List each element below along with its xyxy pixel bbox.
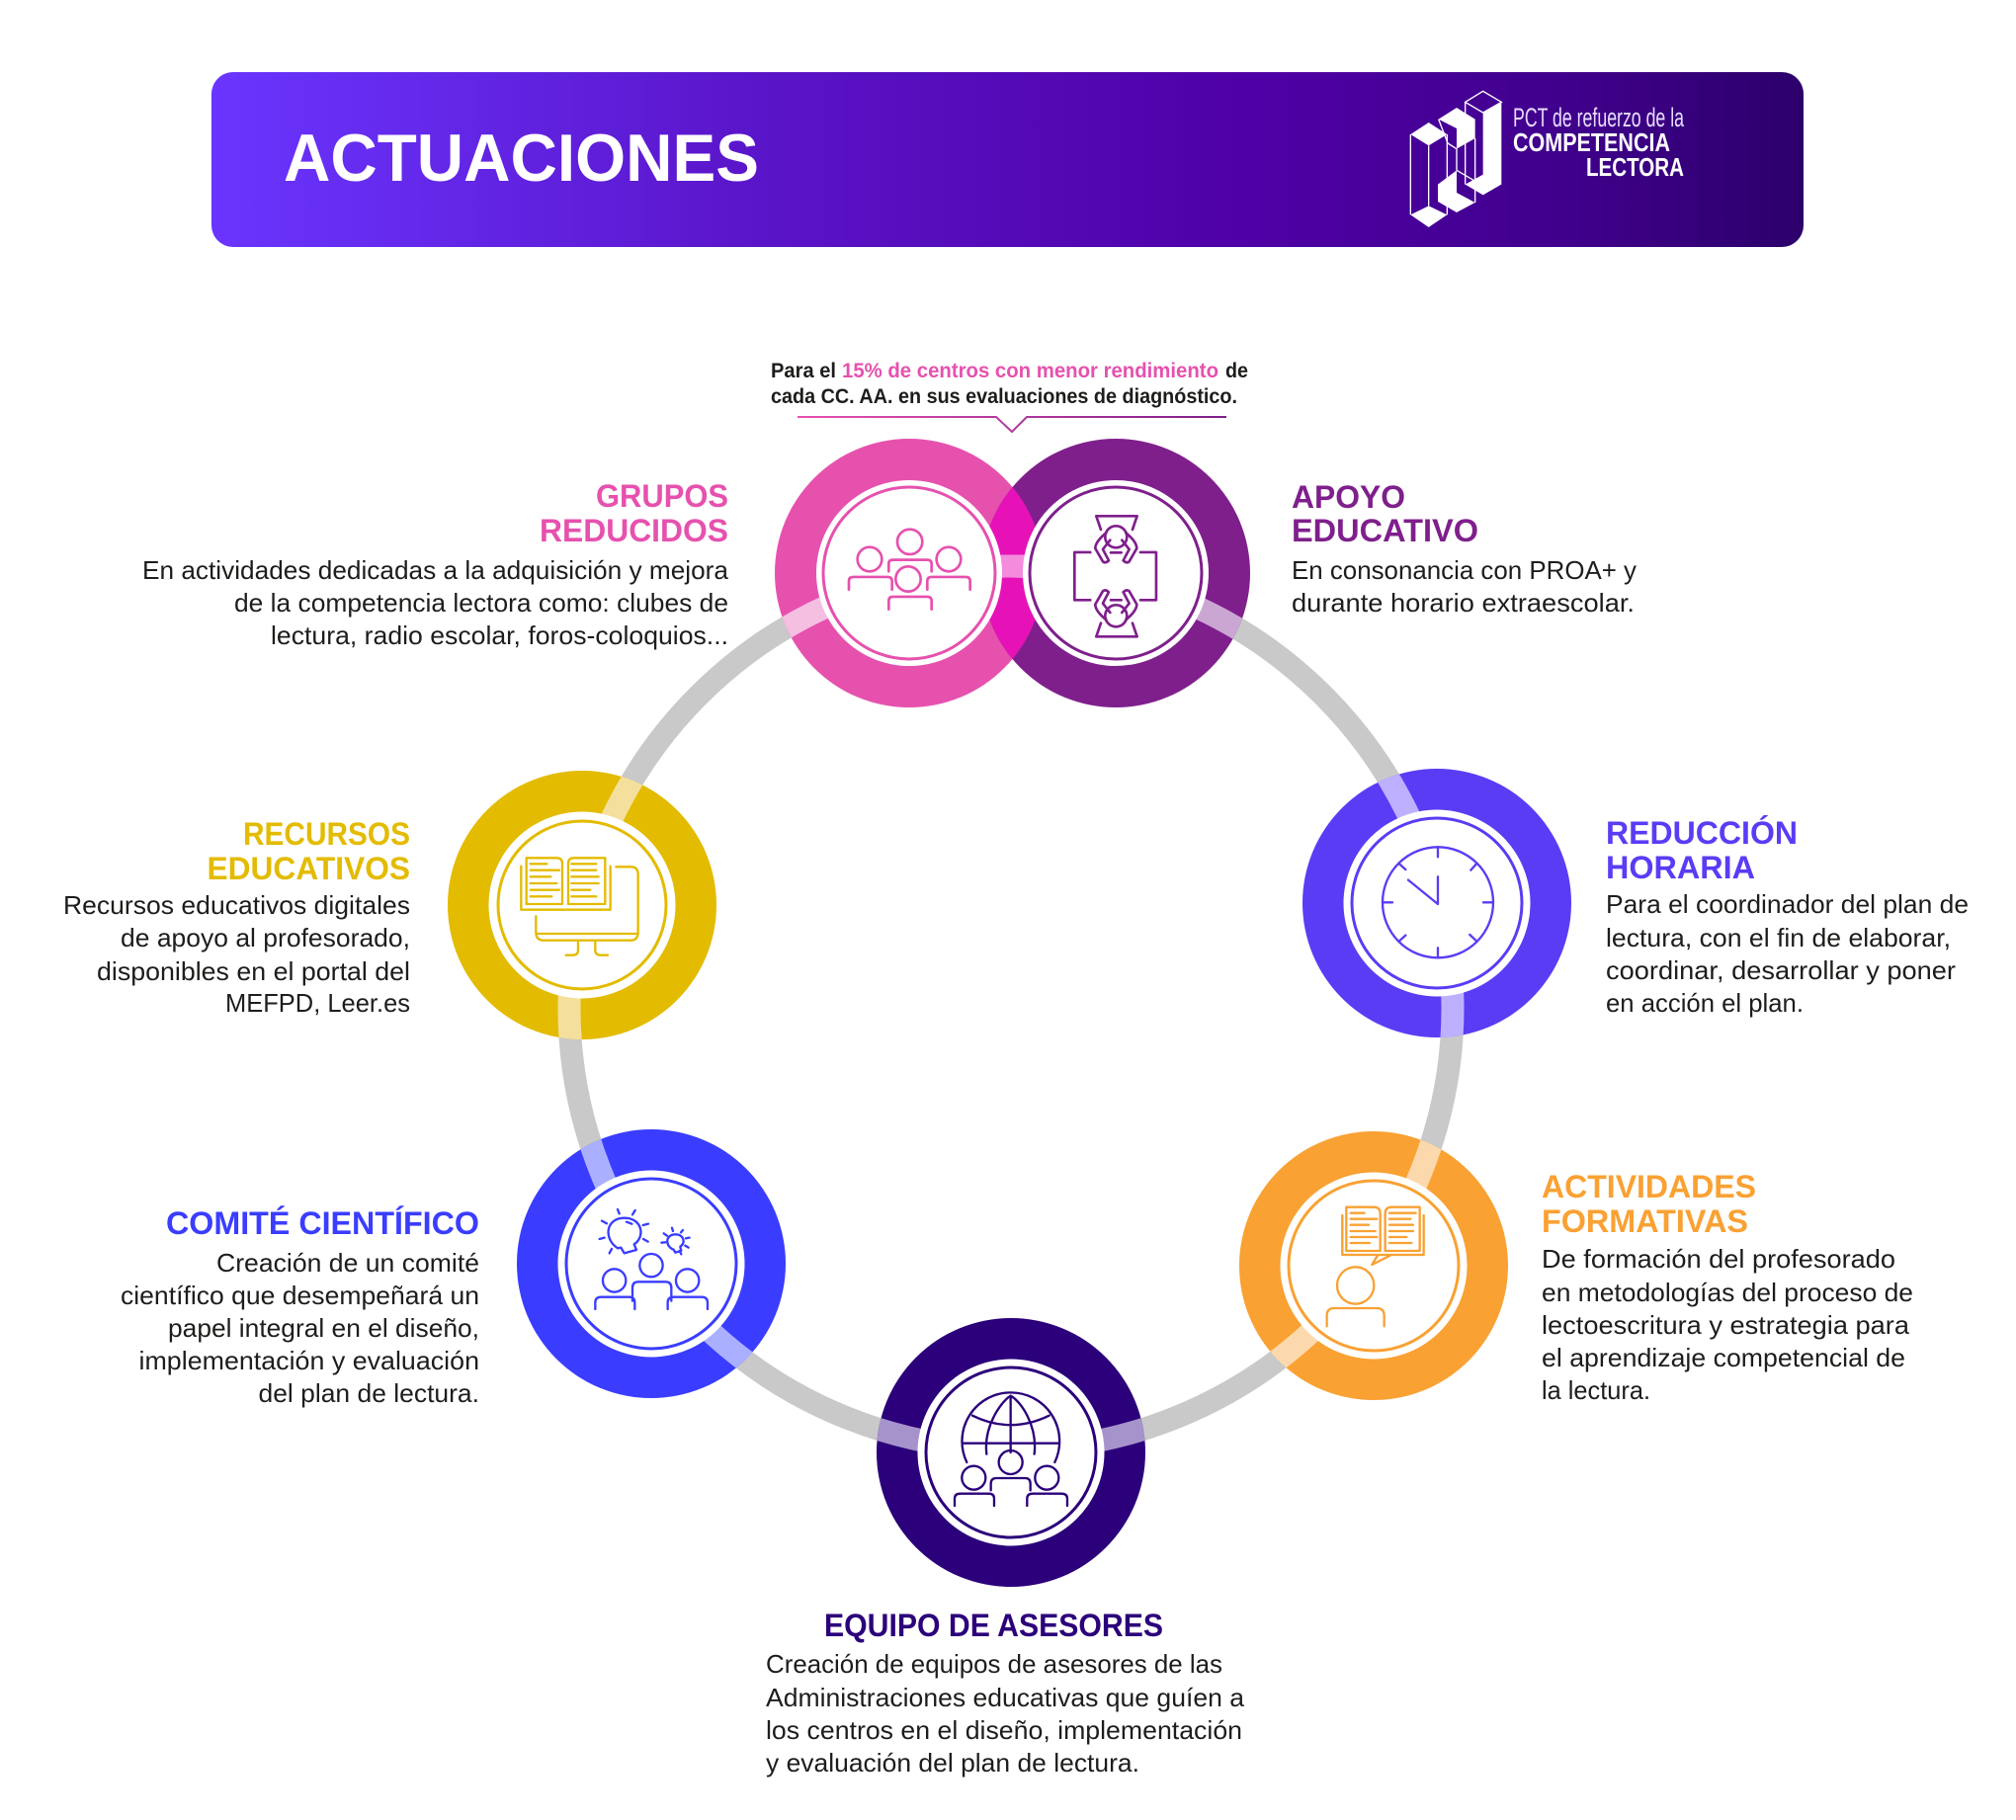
callout: target centres: de bbox=[1225, 360, 1248, 382]
node: comité científico circle bbox=[517, 1129, 786, 1398]
text: apoyo educativo: En consonancia con PROA+ y bbox=[1292, 555, 1637, 585]
text: actividades formativas: De formación del profesorado bbox=[1542, 1244, 1895, 1274]
text: grupos reducidos: lectura, radio escolar, foros-coloquios... bbox=[271, 620, 728, 650]
text: comité científico: Creación de un comité bbox=[216, 1248, 479, 1278]
text: actividades formativas: la lectura. bbox=[1542, 1375, 1650, 1405]
node: reducción horaria circle bbox=[1302, 769, 1571, 1037]
icon: person with book speech bubble bbox=[1327, 1207, 1424, 1326]
text: grupos reducidos: de la competencia lectora como: clubes de bbox=[234, 588, 728, 618]
text: comité científico: implementación y evaluación bbox=[138, 1346, 479, 1375]
text: actividades formativas bbox=[1542, 1169, 1913, 1405]
text: reducción horaria: Para el coordinador del plan de bbox=[1606, 889, 1969, 919]
text: equipo de asesores: Administraciones educativas que guíen a bbox=[766, 1683, 1245, 1712]
text: grupos reducidos: REDUCIDOS bbox=[540, 513, 728, 548]
text: recursos educativos: de apoyo al profesorado, bbox=[121, 923, 410, 952]
icon: group of people bbox=[849, 530, 970, 610]
logo text: LECTORA bbox=[1586, 152, 1684, 182]
icon: globe with people bbox=[955, 1392, 1067, 1506]
text: reducción horaria: REDUCCIÓN bbox=[1606, 815, 1798, 851]
text: apoyo educativo bbox=[1292, 479, 1637, 618]
text: recursos educativos: MEFPD, Leer.es bbox=[225, 988, 410, 1018]
text: comité científico: del plan de lectura. bbox=[259, 1378, 479, 1408]
node: actividades formativas circle bbox=[1239, 1131, 1508, 1400]
callout: target centres: Para el bbox=[771, 360, 836, 382]
text: reducción horaria: HORARIA bbox=[1606, 850, 1755, 885]
text: actividades formativas: el aprendizaje competencial de bbox=[1542, 1343, 1905, 1372]
text: apoyo educativo: APOYO bbox=[1292, 479, 1405, 515]
text: reducción horaria: coordinar, desarrollar y poner bbox=[1606, 955, 1956, 985]
text: recursos educativos: Recursos educativos digitales bbox=[63, 890, 410, 920]
text: actividades formativas: ACTIVIDADES bbox=[1542, 1169, 1756, 1204]
connecting ring bbox=[569, 566, 1453, 1449]
text: comité científico: papel integral en el diseño, bbox=[168, 1313, 479, 1343]
text: reducción horaria: en acción el plan. bbox=[1606, 988, 1804, 1018]
text: apoyo educativo: durante horario extraescolar. bbox=[1292, 588, 1635, 618]
icon: book and monitor bbox=[521, 858, 638, 955]
text: equipo de asesores: EQUIPO DE ASESORES bbox=[824, 1608, 1163, 1643]
title: ACTUACIONES bbox=[284, 121, 759, 196]
text: equipo de asesores: Creación de equipos de asesores de las bbox=[766, 1649, 1222, 1679]
text: recursos educativos: RECURSOS bbox=[243, 816, 410, 852]
text: equipo de asesores: los centros en el diseño, implementación bbox=[766, 1715, 1242, 1745]
text: grupos reducidos: En actividades dedicadas a la adquisición y mejora bbox=[142, 555, 729, 585]
text: actividades formativas: FORMATIVAS bbox=[1542, 1203, 1748, 1239]
text: grupos reducidos bbox=[142, 478, 729, 650]
callout: target centres: cada CC. AA. en sus evaluaciones de diagnóstico. bbox=[771, 385, 1237, 408]
text: equipo de asesores: y evaluación del plan de lectura. bbox=[766, 1748, 1139, 1778]
icon: two people at a table bbox=[1074, 516, 1156, 636]
text: equipo de asesores bbox=[766, 1608, 1245, 1778]
text: reducción horaria bbox=[1606, 815, 1969, 1018]
node: recursos educativos circle bbox=[448, 771, 716, 1039]
text: actividades formativas: lectoescritura y estrategia para bbox=[1542, 1310, 1910, 1340]
header banner bbox=[211, 72, 1804, 247]
logo text: PCT de refuerzo de la bbox=[1513, 103, 1685, 132]
icon: people with light bulbs bbox=[595, 1209, 708, 1309]
text: reducción horaria: lectura, con el fin de elaborar, bbox=[1606, 923, 1951, 952]
text: comité científico bbox=[121, 1205, 479, 1408]
logo text bbox=[1513, 103, 1685, 182]
icon: clock bbox=[1383, 847, 1493, 957]
callout: target centres bbox=[771, 360, 1248, 432]
logo: PCT de refuerzo de la competencia lectora bbox=[1410, 91, 1685, 227]
text: comité científico: científico que desempeñará un bbox=[121, 1281, 479, 1310]
text: recursos educativos: disponibles en el portal del bbox=[97, 956, 410, 986]
logo mark bbox=[1410, 91, 1501, 227]
logo text: COMPETENCIA bbox=[1513, 127, 1670, 157]
node: grupos reducidos and apoyo educativo circles bbox=[775, 439, 1250, 707]
text: comité científico: COMITÉ CIENTÍFICO bbox=[166, 1205, 479, 1241]
text: apoyo educativo: EDUCATIVO bbox=[1292, 513, 1478, 548]
node: equipo de asesores circle bbox=[877, 1318, 1145, 1587]
callout: target centres: 15% de centros con menor rendimiento bbox=[842, 360, 1218, 382]
text: recursos educativos bbox=[63, 816, 410, 1018]
text: recursos educativos: EDUCATIVOS bbox=[208, 851, 410, 886]
text: actividades formativas: en metodologías del proceso de bbox=[1542, 1278, 1913, 1307]
text: grupos reducidos: GRUPOS bbox=[596, 478, 728, 514]
